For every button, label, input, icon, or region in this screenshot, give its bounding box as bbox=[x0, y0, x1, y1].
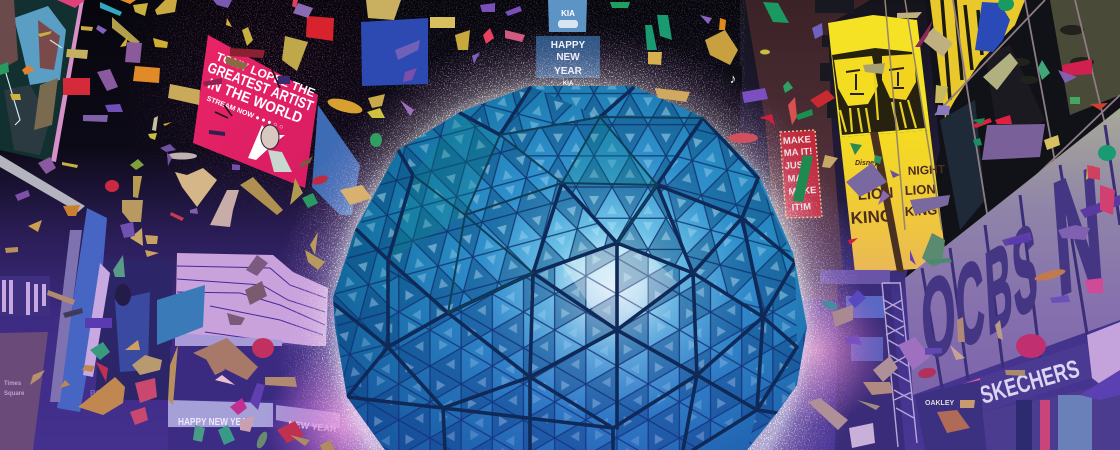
confetti: top right bbox=[610, 0, 1120, 246]
panel: CBS facade: S bbox=[1009, 197, 1040, 343]
sign: make it just red marquee bbox=[780, 130, 822, 218]
banner: happy new year lower left: NEW YEAR bbox=[288, 419, 337, 434]
background: left and centre street bbox=[0, 0, 760, 450]
panel: CBS facade: C bbox=[953, 236, 987, 373]
sign: KIA screen bbox=[548, 0, 587, 32]
panel: olive upper windows bbox=[940, 0, 1120, 230]
panel: lilac right corner bbox=[1087, 322, 1120, 400]
background: right street bbox=[740, 0, 1120, 450]
billboard: lion king lower panel: NIGHT bbox=[907, 162, 946, 178]
icon: tiktok sign bbox=[724, 66, 742, 90]
billboard: blue side screen bbox=[312, 105, 360, 215]
sign: happy new year screen: NEW bbox=[556, 52, 580, 63]
billboard: lion king lower panel: KING bbox=[850, 206, 894, 228]
billboard: pink greatest artist bbox=[193, 35, 320, 188]
confetti: top left bbox=[0, 0, 240, 221]
building: dark glass facade bbox=[905, 0, 1120, 280]
panel: CBS facade: B bbox=[982, 218, 1015, 360]
billboard: lion king lower panel: KING bbox=[904, 202, 938, 219]
panel: CBS facade bbox=[905, 108, 1120, 395]
ball: facet lights rotated fifteen degrees bbox=[460, 86, 795, 317]
panel: lower dark crowd block bbox=[170, 346, 340, 400]
sign: KIA screen: KIA bbox=[561, 9, 575, 18]
sign: make it just red marquee: MA bbox=[787, 173, 803, 185]
icon: tiktok sign: ♪ bbox=[730, 71, 736, 86]
ball: bright centre facets bbox=[560, 243, 680, 330]
panel: blue lit strip bbox=[57, 208, 107, 412]
sign: happy new year screen bbox=[536, 36, 600, 78]
ball: facet lights aligned horizontally bbox=[500, 86, 703, 273]
billboard: pink greatest artist: IN THE WORLD bbox=[205, 75, 305, 127]
billboard: lion king lower panel: LION bbox=[857, 185, 894, 204]
panel: pink store sign bbox=[940, 378, 982, 420]
billboard: top left portraits bbox=[0, 0, 84, 162]
billboard: lion king upper panel bbox=[828, 15, 930, 137]
background: pink speckled sky around billboard bbox=[100, 0, 370, 230]
halo: soft white glow around ball bbox=[260, 20, 880, 450]
halo: white sparkle around ball bbox=[240, 0, 900, 450]
ball: base glow bbox=[330, 80, 810, 450]
building: brick windows bbox=[815, 0, 854, 118]
panel: left street signs: Square bbox=[4, 391, 25, 397]
panel: blue windows centre right bbox=[820, 270, 890, 361]
confetti: upper centre left bbox=[28, 0, 525, 232]
halo: pink glow bottom left bbox=[265, 340, 425, 450]
building: brick tower bbox=[745, 0, 870, 300]
confetti: lower right bbox=[808, 233, 1120, 448]
billboard: yellow striped far panel bbox=[930, 0, 1025, 118]
panel: CBS facade: N bbox=[1048, 133, 1107, 331]
sign: make it just red marquee: IT!M bbox=[791, 201, 812, 214]
billboard: white stepped wave bbox=[175, 253, 328, 356]
sign: skechers: SKECHERS bbox=[977, 355, 1083, 410]
panel: left street signs: Times bbox=[4, 381, 22, 387]
billboard: pink greatest artist: GREATEST ARTIST bbox=[205, 59, 316, 115]
ball: indigo shading toward base bbox=[335, 276, 807, 450]
panel: store fronts bottom right: OAKLEY bbox=[925, 400, 954, 407]
billboard: pink greatest artist: TONY LOPEZ THE bbox=[214, 49, 317, 100]
panel: store fronts bottom right bbox=[915, 380, 1120, 450]
confetti: billboard overlap bbox=[203, 48, 313, 168]
panel: CBS facade: O bbox=[919, 249, 959, 383]
ball: teal facets on upper left bbox=[388, 113, 657, 260]
sign: make it just red marquee: MAKE bbox=[788, 185, 817, 198]
confetti: lower left bbox=[5, 222, 335, 450]
ball: facet lights rotated minus fifteen degrees bbox=[333, 112, 617, 397]
structure: steel truss bbox=[882, 282, 917, 447]
speckled dark sky behind top centre bbox=[370, 0, 745, 90]
sign: KIA small logo: KIA bbox=[563, 81, 574, 87]
structure: vertical lilac column bbox=[50, 230, 82, 402]
billboard: man in denim: BOSS bbox=[90, 389, 113, 398]
sign: happy new year screen: YEAR bbox=[554, 66, 583, 77]
structure: lion king support lines bbox=[885, 0, 942, 230]
banner: happy new year lower left: HAPPY NEW YEAR bbox=[178, 417, 254, 428]
ball: thin green frame struts bbox=[413, 117, 703, 313]
structure: silver diagonal bar bbox=[0, 155, 85, 212]
billboard: pink greatest artist: STREAM NOW ● ● ● ○ ○ bbox=[205, 95, 284, 131]
halo: pink glow right bbox=[745, 270, 890, 450]
sign: make it just red marquee: JUST bbox=[784, 159, 810, 172]
billboard: man in denim bbox=[83, 258, 172, 400]
panel: left street signs bbox=[0, 276, 50, 450]
ball: thick frame struts bbox=[333, 88, 797, 450]
sign: happy new year screen: HAPPY bbox=[551, 40, 586, 51]
banner: happy new year lower left bbox=[168, 400, 340, 450]
ball: facet lights rotated thirty degrees bbox=[347, 243, 807, 450]
building: dark storefront block bbox=[835, 280, 905, 450]
sign: make it just red marquee: MA IT! bbox=[783, 146, 813, 159]
sign: make it just red marquee: MAKE bbox=[783, 134, 811, 147]
billboard: lion king lower panel: Disney's bbox=[855, 160, 884, 167]
panel: pink store sign: Reb bbox=[947, 394, 975, 415]
structure: pink mullions on glass bbox=[935, 0, 1120, 232]
billboard: lion king lower panel bbox=[840, 130, 947, 273]
new year's eve ball bbox=[330, 80, 810, 450]
billboard: lion king lower panel: LION bbox=[904, 181, 936, 198]
